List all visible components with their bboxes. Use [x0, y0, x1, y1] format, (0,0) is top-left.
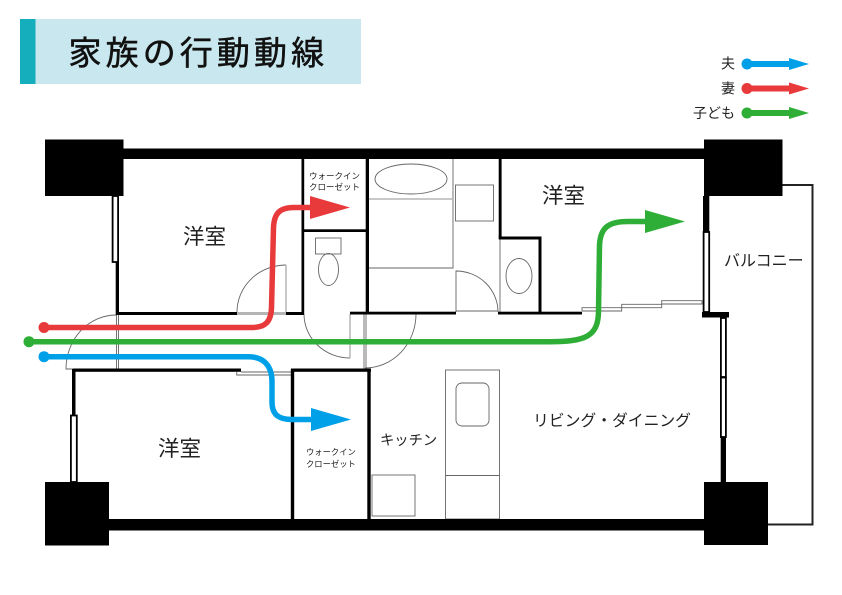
- arrow: husband route: [38, 351, 351, 431]
- room label: living dining: リビング・ダイニング: [533, 412, 691, 430]
- gray lines: [237, 199, 453, 358]
- title: 家族の行動動線: [68, 34, 328, 72]
- kitchen: [372, 475, 415, 516]
- room label: western room top left: 洋室: [183, 225, 226, 249]
- room label: kitchen: キッチン: [380, 433, 437, 449]
- legend item: husband: 夫: [721, 56, 735, 72]
- walls: [72, 148, 729, 530]
- room label: western room bottom left: 洋室: [158, 437, 201, 461]
- bathroom: [375, 164, 447, 194]
- pillars: [45, 140, 782, 546]
- room label: western room top right: 洋室: [542, 184, 585, 208]
- ldk door: [365, 314, 416, 368]
- closet hall door: [304, 314, 350, 358]
- balcony outline: [768, 185, 812, 524]
- legend: [693, 56, 809, 121]
- arrow: wife route: [38, 196, 350, 333]
- room label: walk-in closet bottom: クローゼット: [306, 459, 356, 469]
- legend item: children: 子ども: [693, 105, 735, 121]
- floor plan: [45, 140, 812, 546]
- windows: [71, 196, 726, 482]
- legend item: wife: 妻: [721, 80, 735, 96]
- toilet: [316, 238, 341, 254]
- room label: walk-in closet top: ウォークイン: [309, 171, 360, 181]
- room label: balcony: バルコニー: [724, 253, 804, 270]
- thin fixtures and door swings: [66, 159, 702, 519]
- room door: [237, 265, 286, 312]
- balcony sliding door: [582, 301, 702, 311]
- title: [20, 19, 361, 84]
- room label: walk-in closet top: クローゼット: [309, 182, 360, 192]
- entrance door: [66, 315, 116, 369]
- room label: walk-in closet bottom: ウォークイン: [306, 447, 356, 457]
- sliding door: [237, 372, 291, 375]
- bath door: [456, 271, 498, 312]
- double lines: [116, 314, 366, 369]
- arrow: child route: [24, 210, 685, 347]
